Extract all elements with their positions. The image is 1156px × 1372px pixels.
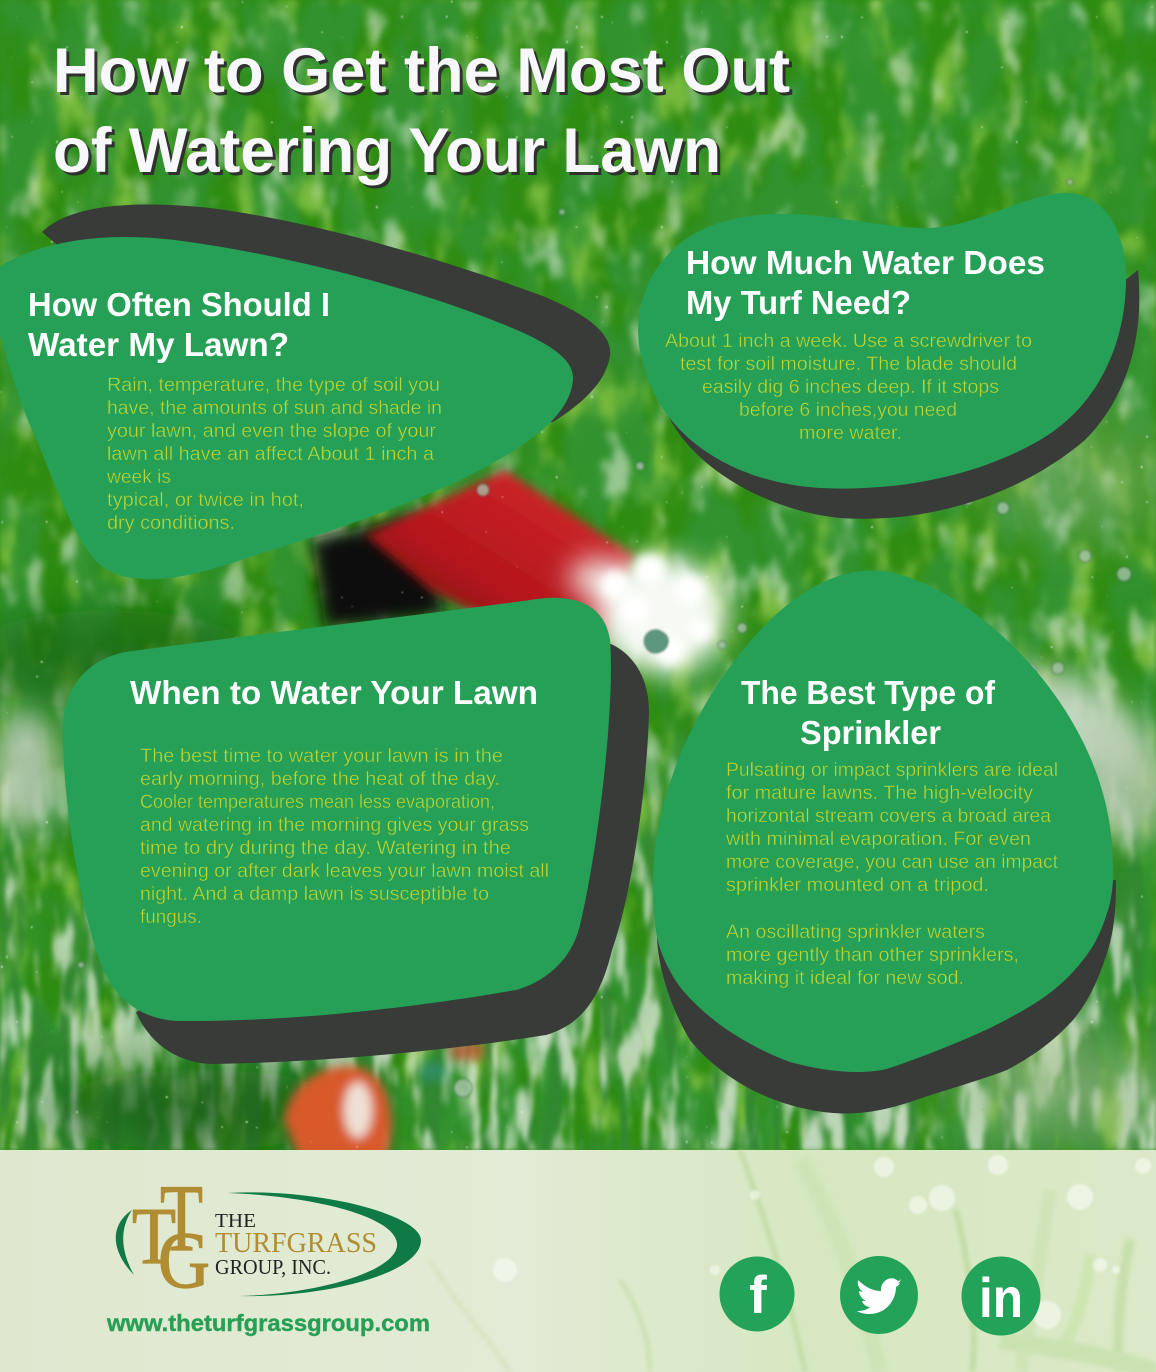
- body text: [140, 745, 549, 928]
- body text: night. And a damp lawn is susceptible to: [140, 883, 489, 905]
- body text: week is: [106, 466, 171, 488]
- body text: time to dry during the day. Watering in the: [140, 837, 511, 859]
- body text: [725, 759, 1059, 989]
- panel: when to water your lawn: [63, 598, 649, 1064]
- heading: Water My Lawn?: [28, 326, 289, 363]
- logo monogram: [132, 1165, 210, 1305]
- body text: Pulsating or impact sprinklers are ideal: [726, 759, 1058, 781]
- body text: An oscillating sprinkler waters: [726, 921, 985, 943]
- body text: have, the amounts of sun and shade in: [107, 397, 442, 419]
- panel: how much water does my turf need: [638, 193, 1139, 519]
- logo wordmark: GROUP, INC.: [215, 1255, 331, 1279]
- body text: lawn all have an affect About 1 inch a: [107, 443, 434, 465]
- body text: [106, 374, 442, 534]
- sprinkler body: [284, 470, 635, 1160]
- body text: typical, or twice in hot,: [107, 489, 304, 511]
- footer background: [0, 1150, 1156, 1372]
- body text: [665, 330, 1032, 444]
- panel: the best type of sprinkler: [653, 570, 1116, 1113]
- heading: Sprinkler: [800, 714, 941, 751]
- body text: fungus.: [140, 906, 202, 928]
- body text: easily dig 6 inches deep. If it stops: [702, 376, 999, 398]
- heading: The Best Type of: [741, 674, 996, 711]
- heading: My Turf Need?: [686, 284, 911, 321]
- logo: The Turfgrass Group, Inc.: [106, 1165, 430, 1336]
- heading: [686, 244, 1045, 321]
- body text: for mature lawns. The high-velocity: [726, 782, 1033, 804]
- icon: twitter: [840, 1256, 918, 1334]
- body text: more coverage, you can use an impact: [726, 851, 1059, 873]
- panel: how often should I water my lawn: [0, 205, 610, 579]
- body text: your lawn, and even the slope of your: [107, 420, 437, 442]
- body text: making it ideal for new sod.: [726, 967, 964, 989]
- logo monogram: T: [160, 1165, 203, 1271]
- title: [53, 36, 793, 189]
- body text: with minimal evaporation. For even: [725, 828, 1031, 850]
- body text: more water.: [799, 422, 902, 444]
- icon: facebook: f: [749, 1266, 767, 1325]
- heading: [741, 674, 996, 751]
- body text: test for soil moisture. The blade should: [680, 353, 1017, 375]
- logo monogram: T: [132, 1193, 176, 1281]
- body text: About 1 inch a week. Use a screwdriver to: [665, 330, 1032, 352]
- heading: How Often Should I: [28, 286, 330, 323]
- title: How to Get the Most Out: [56, 39, 793, 109]
- heading: When to Water Your Lawn: [130, 674, 538, 711]
- icon: linkedin: [962, 1256, 1040, 1336]
- icon: linkedin: in: [979, 1266, 1023, 1329]
- heading: [28, 286, 330, 363]
- title: of Watering Your Lawn: [53, 116, 721, 186]
- body text: early morning, before the heat of the day.: [140, 768, 500, 790]
- body text: more gently than other sprinklers,: [726, 944, 1019, 966]
- body text: The best time to water your lawn is in the: [140, 745, 503, 767]
- logo wordmark: TURFGRASS: [215, 1228, 377, 1259]
- body text: horizontal stream covers a broad area: [726, 805, 1051, 827]
- logo wordmark: THE: [215, 1210, 256, 1232]
- logo swoosh: [228, 1192, 421, 1296]
- body text: sprinkler mounted on a tripod.: [726, 874, 989, 896]
- body text: evening or after dark leaves your lawn moist all: [140, 860, 549, 882]
- logo wordmark: [215, 1210, 377, 1279]
- body text: before 6 inches,you need: [739, 399, 957, 421]
- water spray: [570, 554, 728, 673]
- body text: Cooler temperatures mean less evaporation,: [140, 791, 495, 813]
- heading: How Much Water Does: [686, 244, 1045, 281]
- title: How to Get the Most Out: [53, 36, 790, 106]
- icon: facebook: [720, 1256, 794, 1332]
- body text: dry conditions.: [107, 512, 235, 534]
- logo monogram: G: [158, 1217, 210, 1305]
- body text: Rain, temperature, the type of soil you: [107, 374, 440, 396]
- body text: and watering in the morning gives your grass: [140, 814, 529, 836]
- title: of Watering Your Lawn: [56, 119, 724, 189]
- website: www.theturfgrassgroup.com: [106, 1310, 430, 1336]
